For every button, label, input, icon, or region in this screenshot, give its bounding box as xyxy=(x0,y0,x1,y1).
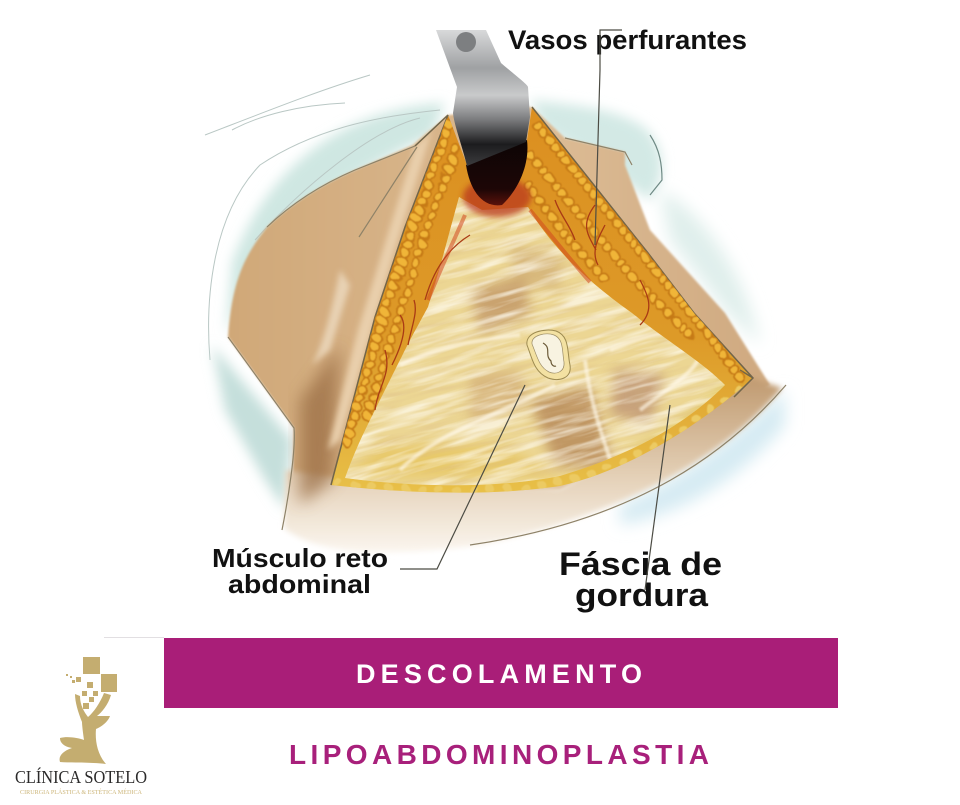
logo icon: pixel squares and kneeling figure xyxy=(60,657,117,764)
umbilicus xyxy=(527,330,570,379)
label: vasos perfurantes xyxy=(508,25,747,245)
label: músculo reto abdominal: Músculo reto xyxy=(212,543,388,573)
skin: flap highlight xyxy=(328,130,432,450)
skin: left torso xyxy=(228,107,770,500)
logo: clínica sotelo xyxy=(15,657,147,796)
label: músculo reto abdominal: abdominal xyxy=(228,569,371,599)
retractor xyxy=(436,30,530,166)
logo tagline: CIRURGIA PLÁSTICA & ESTÉTICA MÉDICA xyxy=(20,788,142,796)
subtitle: lipoabdominoplastia: LIPOABDOMINOPLASTIA xyxy=(289,739,709,770)
skin: lower fade xyxy=(284,378,782,552)
medical illustration: abdominal flap dissection xyxy=(60,30,792,763)
muscle surface xyxy=(345,197,725,486)
bottom right blue shadow xyxy=(620,390,785,525)
label: fáscia de gordura: Fáscia de xyxy=(559,546,722,582)
label: fáscia de gordura: gordura xyxy=(575,577,708,613)
label: fáscia de gordura xyxy=(559,405,722,613)
deep cavity behind retractor xyxy=(466,140,527,205)
label: músculo reto abdominal xyxy=(212,385,525,599)
fat globules xyxy=(338,125,745,491)
banner: descolamento: DESCOLAMENTO xyxy=(356,659,642,689)
red vessels xyxy=(375,200,649,410)
red glow around cavity xyxy=(463,177,531,217)
skin edge outlines xyxy=(228,138,786,545)
skin highlight on torso xyxy=(312,270,350,365)
label: vasos perfurantes: Vasos perfurantes xyxy=(508,25,747,55)
teal surgical drape xyxy=(205,75,760,360)
thin rule beside banner xyxy=(104,637,164,638)
flap edge lines xyxy=(331,107,753,485)
skin: deep shadow xyxy=(300,345,340,505)
logo wordmark: CLÍNICA SOTELO xyxy=(15,766,147,787)
fat layer xyxy=(331,107,753,493)
left shadow xyxy=(212,345,292,510)
banner: descolamento xyxy=(164,638,838,708)
